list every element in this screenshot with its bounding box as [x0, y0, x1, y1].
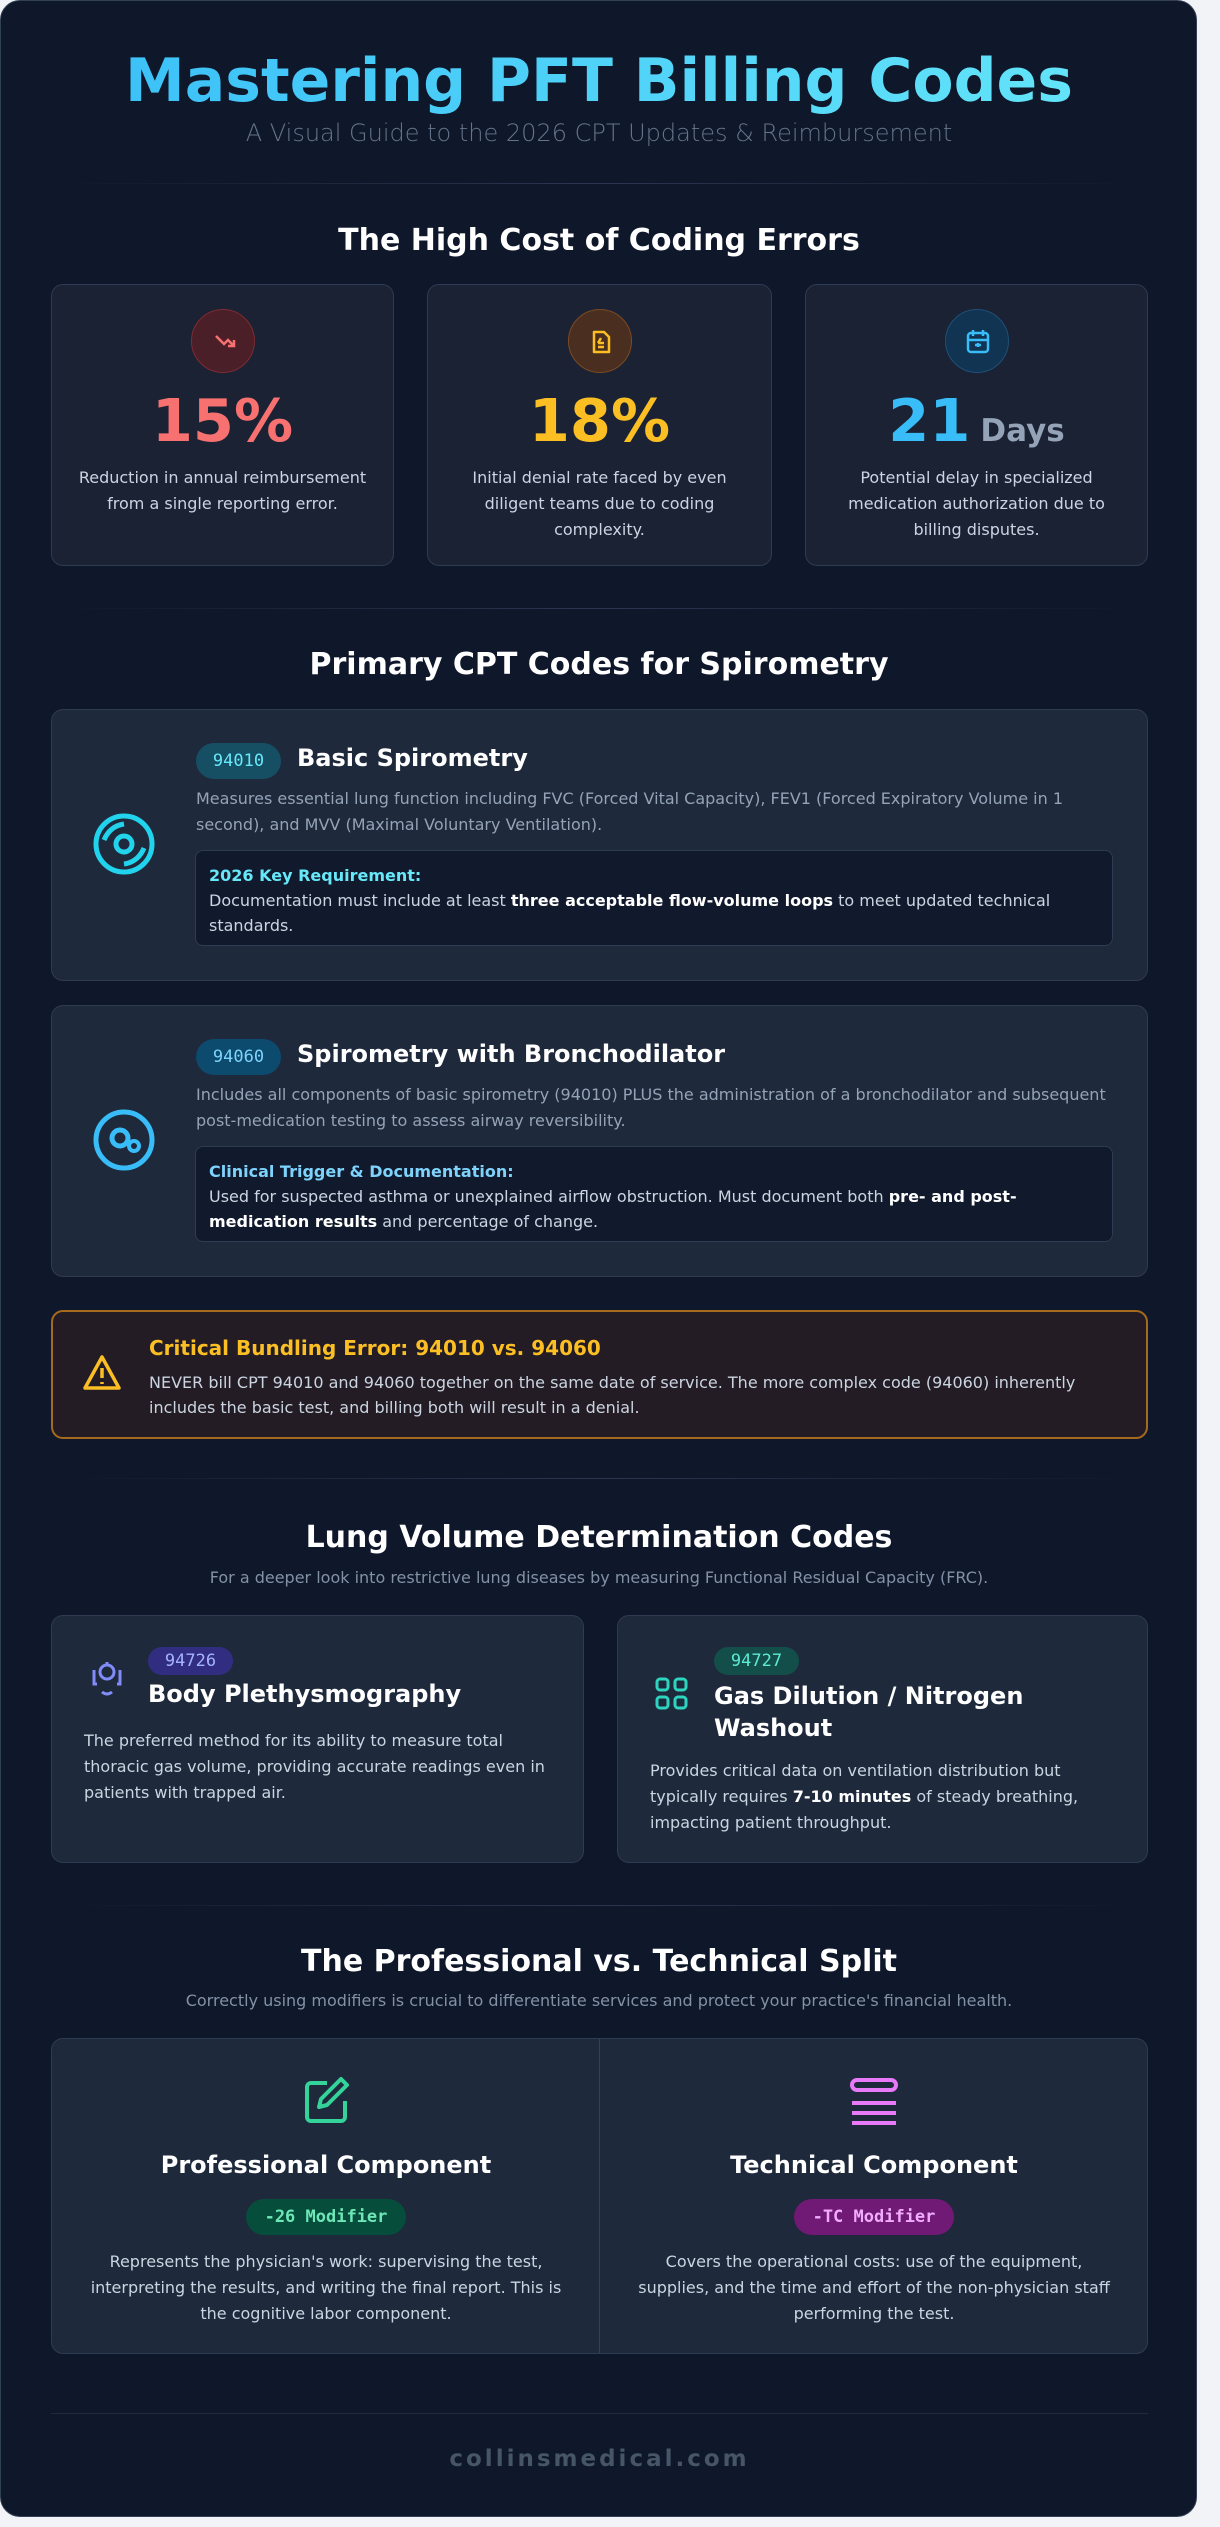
title: Mastering PFT Billing Codes: [125, 46, 1073, 116]
panel: 94060: [51, 1005, 1148, 1277]
description: The preferred method for its ability to measure total thoracic gas volume, providing accurate readings even in patients with trapped air.: [84, 1731, 545, 1802]
description: Potential delay in specialized medication authorization due to billing disputes.: [848, 468, 1105, 539]
callout: key requirement: [195, 850, 1113, 946]
badge: 94726: [165, 1651, 216, 1671]
description: Includes all components of basic spirometry (94010) PLUS the administration of a bronchodilator and subsequent post-medication testing to assess airway reversibility.: [196, 1085, 1106, 1130]
stat card 18%: [427, 284, 772, 566]
callout: clinical trigger: Used for suspected asthma or unexplained airflow obstruction. Must document both pre- and post-medication results and percentage of change.: [209, 1187, 1017, 1231]
badge: [148, 1647, 233, 1675]
subheading: Correctly using modifiers is crucial to differentiate services and protect your practice's financial health.: [186, 1991, 1012, 2010]
title: Spirometry with Bronchodilator: [297, 1040, 725, 1068]
heading: split: The Professional vs. Technical Split: [301, 1944, 897, 1979]
icon: grid: [656, 1678, 688, 1710]
icon: stack: [850, 2078, 898, 2125]
technical component: [638, 2078, 1110, 2323]
description: Reduction in annual reimbursement from a single reporting error.: [79, 468, 366, 513]
icon: pencil: [305, 2076, 350, 2123]
callout: key requirement: Documentation must include at least three acceptable flow-volume loops to meet updated technical standards.: [209, 891, 1050, 935]
description: Measures essential lung function including FVC (Forced Vital Capacity), FEV1 (Forced Expiratory Volume in 1 second), and MVV (Maximal Voluntary Ventilation).: [196, 789, 1063, 834]
title: Basic Spirometry: [297, 744, 528, 772]
callout: clinical trigger: Clinical Trigger & Documentation:: [209, 1162, 514, 1181]
badge: [246, 2199, 406, 2235]
warning title: Critical Bundling Error: 94010 vs. 94060: [149, 1336, 601, 1360]
badge: 94727: [731, 1651, 782, 1671]
number: 18%: [529, 386, 670, 455]
badge: 94060: [213, 1047, 264, 1067]
icon: lung ring plus: [94, 1110, 154, 1170]
panel: 94727: [617, 1615, 1148, 1863]
badge: -TC Modifier: [813, 2207, 935, 2227]
number: 21 Days: [888, 386, 1065, 455]
description: Covers the operational costs: use of the equipment, supplies, and the time and effort of the non-physician staff performing the test.: [638, 2252, 1110, 2323]
badge: [196, 1039, 281, 1075]
callout: key requirement: 2026 Key Requirement:: [209, 866, 421, 885]
description: Initial denial rate faced by even diligent teams due to coding complexity.: [472, 468, 727, 539]
title: Body Plethysmography: [148, 1680, 461, 1708]
subheading: For a deeper look into restrictive lung diseases by measuring Functional Residual Capacity (FRC).: [210, 1568, 988, 1587]
description: Represents the physician's work: supervising the test, interpreting the results, and writing the final report. This is the cognitive labor component.: [91, 2252, 561, 2323]
icon: calendar: [944, 309, 1008, 373]
title: [1, 41, 1197, 121]
badge: 94010: [213, 751, 264, 771]
panel: split: [51, 2038, 1148, 2354]
warning text: NEVER bill CPT 94010 and 94060 together on the same date of service. The more complex code (94060) inherently includes the basic test, and billing both will result in a denial.: [149, 1373, 1075, 1417]
badge: -26 Modifier: [265, 2207, 387, 2227]
stat card 21 days: [805, 284, 1148, 566]
title: Gas Dilution / Nitrogen Washout: [714, 1682, 1023, 1742]
heading: high cost: The High Cost of Coding Errors: [338, 223, 860, 258]
icon: trend down: [190, 309, 254, 373]
panel: 94010: [51, 709, 1148, 981]
subtitle: A Visual Guide to the 2026 CPT Updates & Reimbursement: [246, 119, 952, 147]
callout: clinical trigger: [195, 1146, 1113, 1242]
heading: primary CPT: Primary CPT Codes for Spirometry: [310, 647, 888, 682]
number: 15%: [152, 386, 293, 455]
icon: person: [92, 1662, 122, 1696]
title: Professional Component: [161, 2151, 491, 2179]
heading: lung volume: Lung Volume Determination Codes: [306, 1520, 892, 1555]
badge: [794, 2199, 954, 2235]
icon: warning: [83, 1355, 121, 1390]
description: Provides critical data on ventilation distribution but typically requires 7-10 minutes of steady breathing, impacting patient throughput.: [650, 1761, 1078, 1832]
footer: collinsmedical.com: [449, 2446, 750, 2472]
panel: 94726: [51, 1615, 584, 1863]
badge: [714, 1647, 799, 1675]
title: Technical Component: [730, 2151, 1018, 2179]
badge: [196, 743, 281, 779]
icon: lung ring: [94, 814, 154, 874]
stat card 15%: [51, 284, 394, 566]
warning box: [51, 1310, 1148, 1439]
professional component: [52, 2039, 600, 2353]
icon: document: [568, 309, 632, 373]
